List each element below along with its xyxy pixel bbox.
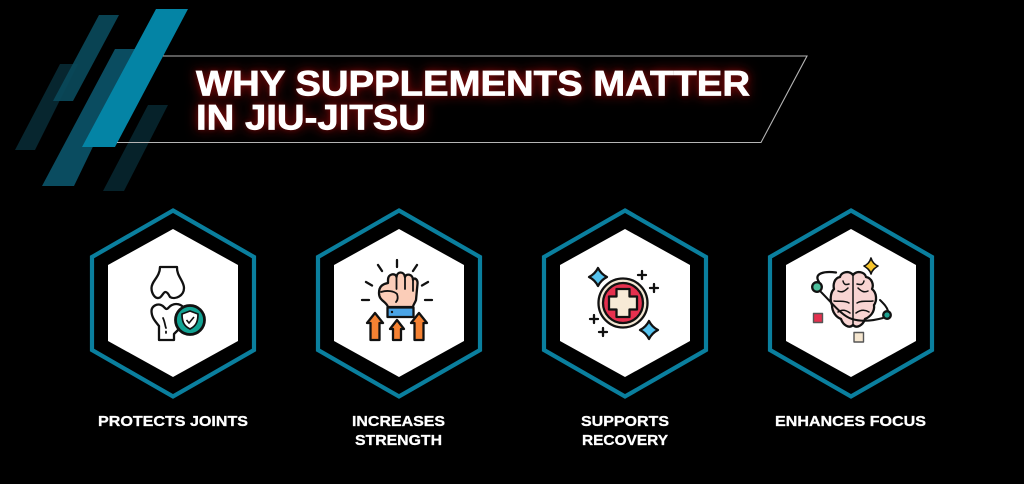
- hexagon fill: [786, 229, 916, 377]
- label: PROTECTS JOINTS: [98, 413, 248, 430]
- label: ENHANCES FOCUS: [775, 413, 926, 430]
- icon: brain with orbit: [812, 258, 891, 342]
- title: WHY SUPPLEMENTS MATTER: [196, 64, 750, 104]
- hexagon fill: [334, 229, 464, 377]
- hexagon fill: [108, 229, 238, 377]
- panel: enhances focus: [770, 210, 932, 430]
- icon: knee joint with shield: [152, 267, 204, 340]
- panel: increases strength: [318, 210, 480, 449]
- icon: raised fist with arrows: [362, 260, 432, 340]
- panel: protects joints: [92, 210, 254, 430]
- hexagon fill: [560, 229, 690, 377]
- hexagon frame: [544, 210, 706, 396]
- label: SUPPORTS: [581, 413, 669, 430]
- panel: supports recovery: [544, 210, 706, 449]
- hexagon frame: [770, 210, 932, 396]
- label: INCREASES: [352, 413, 445, 430]
- icon: medical cross with sparkles: [589, 268, 658, 339]
- hexagon frame: [92, 210, 254, 396]
- panel: supports recovery: RECOVERY: [582, 432, 668, 449]
- panel: increases strength: STRENGTH: [355, 432, 442, 449]
- hexagon frame: [318, 210, 480, 396]
- title: IN JIU-JITSU: [196, 98, 426, 138]
- title banner outline: [117, 56, 807, 142]
- title: [196, 64, 750, 138]
- decorative slanted stripes: [15, 9, 188, 191]
